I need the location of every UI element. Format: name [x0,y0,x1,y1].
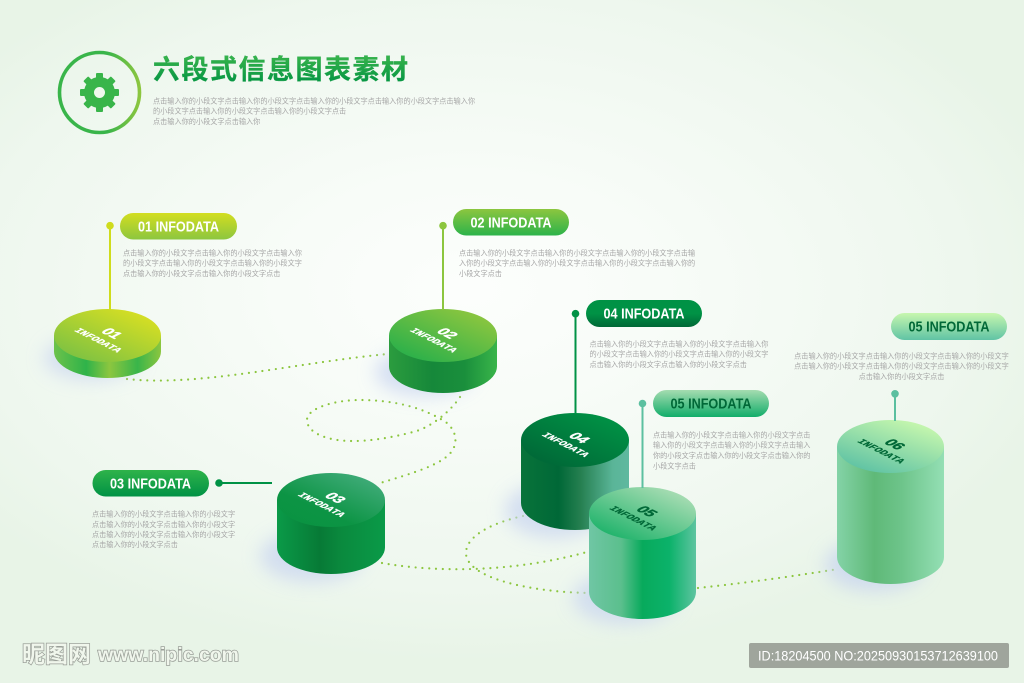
header description: 点击输入你的小段文字点击输入你 [153,117,260,126]
item 1: description: 的小段文字点击输入你的小段文字点击输入你的小段文字 [123,259,302,268]
item 3: description: 点击输入你的小段文字点击输入你的小段文字 [92,520,235,529]
item 3: description: 点击输入你的小段文字点击输入你的小段文字 [92,510,235,519]
item 4: description: 点击输入你的小段文字点击输入你的小段文字点击输入你 [590,339,768,348]
item 1: label pill: 01 INFODATA [138,218,219,236]
item 1: description: 点击输入你的小段文字点击输入你的小段文字点击 [123,269,280,278]
item 2: description: 点击输入你的小段文字点击输入你的小段文字点击输入你的小段文字点击输 [459,248,695,257]
watermark: ID stamp: ID:18204500 NO:20250930153712639100 [758,648,998,664]
item 3: cylinder 03: 03 [320,491,349,505]
item 3: cylinder 03 [260,473,385,582]
item 2: stem and dot [439,222,447,310]
item 4: label pill: 04 INFODATA [604,306,685,322]
item 5: cylinder 05 [573,487,696,624]
item 3: description [92,510,235,549]
item 6: description: 点击输入你的小段文字点击输入你的小段文字点击输入你的小段文字 [794,362,1009,371]
item 2: description: 小段文字点击 [459,269,502,278]
item 4: description: 点击输入你的小段文字点击输入你的小段文字点击 [590,360,747,369]
item 6: description: 点击输入你的小段文字点击 [859,372,944,381]
title: 六段式信息图表素材 [153,55,408,85]
item 6: cylinder 06: INFODATA [853,438,908,466]
item 3: description: 点击输入你的小段文字点击输入你的小段文字 [92,530,235,539]
item 4: description: 的小段文字点击输入你的小段文字点击输入你的小段文字 [590,350,768,359]
item 6: label pill [891,313,1007,340]
item 5: cylinder 05: 05 [632,504,660,519]
watermark: nipic logo: 昵图网 [22,641,91,667]
item 5: description [653,430,810,470]
item 5: stem and dot [639,400,646,488]
item 3: label pill: 03 INFODATA [110,476,191,492]
watermark: ID stamp [749,643,1009,668]
item 2: description: 入你的小段文字点击输入你的小段文字点击输入你的小段文字点击输入你的 [459,259,695,268]
item 1: cylinder 01: INFODATA [70,327,125,355]
item 1: cylinder 01 [44,309,161,380]
item 3: connector and dot [215,479,272,487]
item 6: description [794,351,1009,381]
item 6: label pill: 05 INFODATA [908,318,990,336]
item 3: description: 点击输入你的小段文字点击 [92,540,178,549]
item 5: cylinder 05: INFODATA [605,505,660,533]
item 1: label pill [120,213,237,240]
item 1: description: 点击输入你的小段文字点击输入你的小段文字点击输入你 [123,248,302,257]
item 6: cylinder 06: 06 [880,437,908,452]
item 6: cylinder 06 [825,420,944,591]
item 4: description [590,339,768,369]
item 4: label pill [586,300,702,327]
item 2: description [459,248,695,278]
item 5: description: 输入你的小段文字点击输入你的小段文字点击输入 [653,441,810,450]
item 2: cylinder 02 [375,309,497,396]
item 5: description: 你的小段文字点击输入你的小段文字点击输入你的 [653,451,810,460]
item 3: cylinder 03: INFODATA [294,492,348,519]
item 4: stem and dot [572,310,579,414]
watermark: nipic logo: www.nipic.com [97,645,239,666]
item 1: description [123,248,302,278]
item 6: stem and dot [891,390,899,421]
item 4: cylinder 04: INFODATA [538,432,592,459]
watermark: nipic logo [22,641,239,667]
item 5: label pill: 05 INFODATA [670,396,752,412]
header description: 点击输入你的小段文字点击输入你的小段文字点击输入你的小段文字点击输入你的小段文字点击输入你 [153,96,475,105]
item 2: label pill [453,209,569,236]
dotted connector paths [127,354,838,593]
item 3: label pill [92,470,209,496]
header icon: gear in ring [60,52,140,132]
item 6: description: 点击输入你的小段文字点击输入你的小段文字点击输入你的小段文字 [794,351,1009,360]
item 5: description: 小段文字点击 [653,461,696,470]
item 2: cylinder 02: 02 [432,326,461,341]
header description [153,96,475,126]
item 5: description: 点击输入你的小段文字点击输入你的小段文字点击 [653,430,810,439]
item 5: label pill [653,390,769,417]
item 1: cylinder 01: 01 [97,326,125,341]
item 4: cylinder 04 [505,413,629,538]
item 2: cylinder 02: INFODATA [406,327,460,355]
item 1: stem and dot [106,222,114,310]
header description: 的小段文字点击输入你的小段文字点击输入你的小段文字点击 [153,107,346,116]
item 4: cylinder 04: 04 [564,431,594,446]
item 2: label pill: 02 INFODATA [470,214,552,232]
